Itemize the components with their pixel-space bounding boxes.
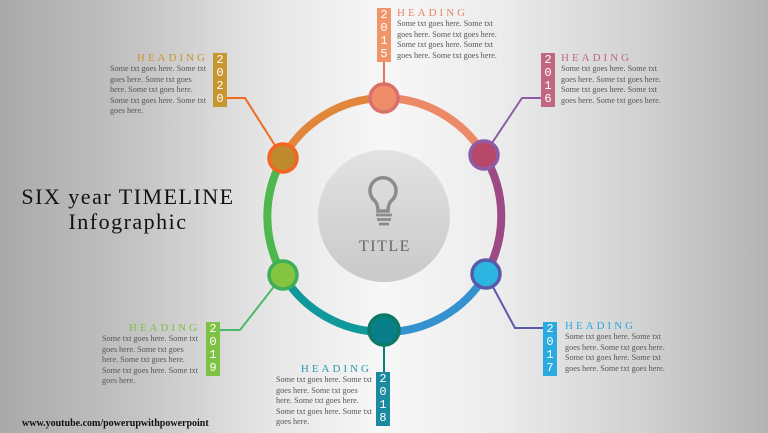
text block 2017: Some txt goes here. Some txt goes here. Some txt goes here. Some txt goes here. Some txt goes here. Some txt goes here. <box>565 332 665 373</box>
text block 2018: Some txt goes here. Some txt goes here. Some txt goes here. Some txt goes here. Some txt goes here. Some txt goes here. <box>276 375 372 426</box>
text block 2017: HEADING <box>565 320 636 332</box>
main title: SIX year TIMELINE <box>21 184 235 209</box>
icon: light bulb <box>370 178 396 224</box>
text block 2016: Some txt goes here. Some txt goes here. Some txt goes here. Some txt goes here. Some txt goes here. Some txt goes here. <box>561 64 661 105</box>
year 2015 box <box>377 8 391 62</box>
year 2015 box: 2 <box>380 8 388 22</box>
footer url: www.youtube.com/powerupwithpowerpoint <box>22 418 209 429</box>
year 2019 box: 1 <box>209 348 217 362</box>
nodes <box>269 84 500 345</box>
text block 2020: HEADING <box>137 52 208 64</box>
year 2019 box: 2 <box>209 322 217 336</box>
text block 2020: Some txt goes here. Some txt goes here. Some txt goes here. Some txt goes here. Some txt goes here. Some txt goes here. <box>110 64 206 115</box>
year 2018 box: 2 <box>379 372 387 386</box>
center title circle: TITLE <box>359 238 411 255</box>
year 2016 box: 6 <box>544 92 552 106</box>
year 2015 box: 1 <box>380 34 388 48</box>
year 2020 box: 0 <box>216 66 224 80</box>
year 2018 box: 8 <box>379 411 387 425</box>
year 2019 box: 9 <box>209 361 217 375</box>
year 2016 box <box>541 53 555 107</box>
year 2017 box <box>543 322 557 376</box>
main title: Infographic <box>68 209 188 234</box>
year 2017 box: 2 <box>546 322 554 336</box>
main title <box>21 184 235 234</box>
year 2018 box: 0 <box>379 385 387 399</box>
year 2020 box: 2 <box>216 79 224 93</box>
text block 2018: HEADING <box>301 363 372 375</box>
year 2015 box: 5 <box>380 47 388 61</box>
year 2020 box <box>213 53 227 107</box>
text block 2016: HEADING <box>561 52 632 64</box>
year 2017 box: 7 <box>546 361 554 375</box>
center title circle <box>318 150 450 282</box>
year 2019 box <box>206 322 220 376</box>
text block 2015: HEADING <box>397 7 468 19</box>
year 2017 box: 0 <box>546 335 554 349</box>
text block 2019: Some txt goes here. Some txt goes here. Some txt goes here. Some txt goes here. Some txt goes here. Some txt goes here. <box>102 334 198 385</box>
text block 2015: Some txt goes here. Some txt goes here. Some txt goes here. Some txt goes here. Some txt goes here. Some txt goes here. <box>397 19 497 60</box>
ring arcs <box>267 98 501 332</box>
year 2018 box: 1 <box>379 398 387 412</box>
year 2020 box: 2 <box>216 53 224 67</box>
text block 2019: HEADING <box>129 322 200 334</box>
year 2016 box: 0 <box>544 66 552 80</box>
year 2016 box: 2 <box>544 53 552 67</box>
year 2016 box: 1 <box>544 79 552 93</box>
year 2020 box: 0 <box>216 92 224 106</box>
connectors <box>220 62 543 372</box>
year 2017 box: 1 <box>546 348 554 362</box>
year 2018 box <box>376 372 390 426</box>
year 2019 box: 0 <box>209 335 217 349</box>
year 2015 box: 0 <box>380 21 388 35</box>
